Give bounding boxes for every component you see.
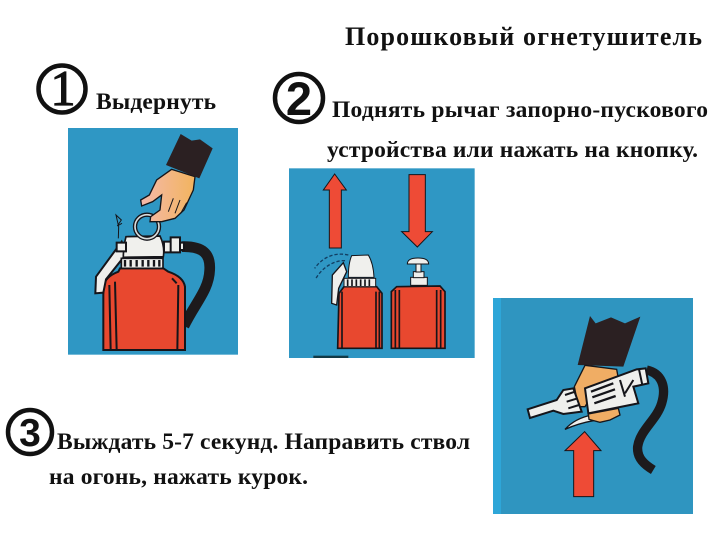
cuff	[166, 134, 213, 178]
left extinguisher	[332, 255, 382, 348]
step 2 text	[327, 97, 708, 163]
right extinguisher	[391, 258, 445, 348]
step 2 text: устройства или нажать на кнопку.	[327, 137, 698, 163]
step 3 text: Выждать 5-7 секунд. Направить ствол	[57, 429, 470, 455]
panel 3: aim nozzle and squeeze trigger	[493, 298, 693, 514]
hand back	[574, 365, 618, 407]
extinguisher body	[103, 268, 185, 350]
cuff	[578, 316, 640, 367]
title: Порошковый огнетушитель	[345, 22, 702, 51]
lever	[95, 242, 127, 293]
handle body	[585, 368, 648, 413]
trigger	[565, 415, 593, 429]
fingers	[588, 408, 620, 422]
step 3 text: на огонь, нажать курок.	[49, 464, 308, 490]
nozzle	[528, 388, 582, 418]
panel 1: pull the pin	[68, 128, 238, 355]
hose	[182, 247, 210, 326]
arrow down	[402, 175, 432, 247]
step 1 number badge	[38, 60, 86, 116]
step 1 number badge: 1	[50, 60, 76, 116]
motion dashes	[315, 254, 348, 278]
step 2 number badge: 2	[286, 72, 312, 125]
hose	[638, 370, 664, 470]
valve head	[121, 258, 163, 268]
step 3 number badge: 3	[19, 412, 41, 455]
arrow up	[323, 174, 346, 248]
arrow up	[565, 432, 601, 497]
step 3 number badge	[8, 410, 52, 455]
hand	[141, 169, 195, 222]
step 3 text	[49, 429, 470, 490]
step 2 text: Поднять рычаг запорно-пускового	[332, 97, 708, 123]
pin ring and wire	[135, 215, 159, 239]
panel 2: raise lever or press button	[289, 168, 475, 358]
step 2 number badge	[275, 72, 323, 125]
step 1 text: Выдернуть	[96, 89, 216, 115]
